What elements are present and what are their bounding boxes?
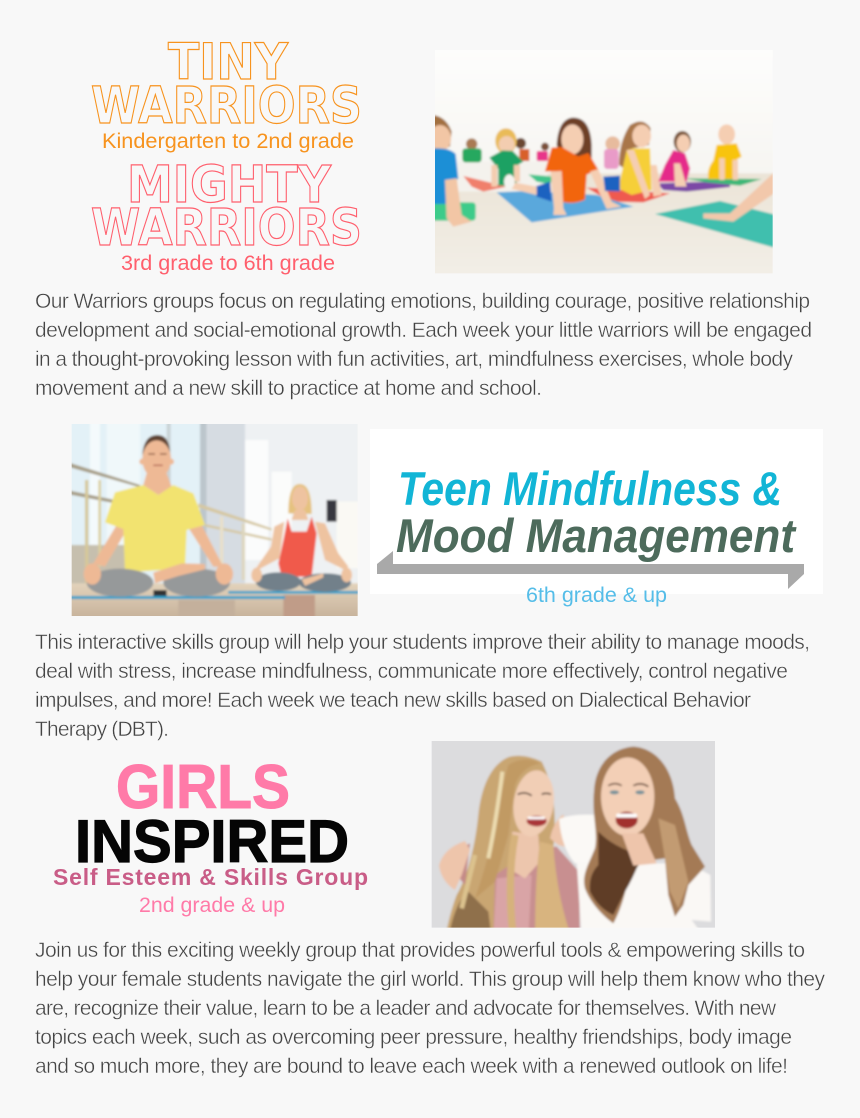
heading: Mighty Warriors: MIGHTY [127, 156, 332, 215]
paragraph: Girls Inspired group: topics each week, such as overcoming peer pressure, healthy friendships, body image [35, 1026, 792, 1049]
paragraph: Warriors groups: development and social-emotional growth. Each week your little warriors will be engaged [35, 319, 812, 342]
paragraph: Teen group: Therapy (DBT). [35, 718, 169, 741]
paragraph: Warriors groups: Our Warriors groups focus on regulating emotions, building courage, positive relationship [35, 290, 810, 313]
heading: Tiny Warriors: TINY [168, 33, 289, 91]
paragraph: Girls Inspired group: and so much more, they are bound to leave each week with a renewed outlook on life! [35, 1055, 788, 1078]
paragraph: Warriors groups [35, 290, 812, 400]
paragraph: Teen group: This interactive skills group will help your students improve their ability to manage moods, [35, 631, 810, 654]
photo: children doing yoga on mats [435, 114, 773, 274]
logo title line 2: Mood Management [396, 509, 797, 562]
heading: Girls Inspired: GIRLS [116, 753, 290, 822]
paragraph: Teen group [35, 631, 810, 741]
logo arrow band [377, 551, 804, 589]
subheading: 3rd grade to 6th grade: 3rd grade to 6th grade [121, 252, 335, 275]
logo title line 1: Teen Mindfulness & [398, 462, 782, 515]
paragraph: Warriors groups: movement and a new skill to practice at home and school. [35, 377, 542, 400]
photo: two laughing girls [432, 741, 715, 928]
paragraph: Teen group: deal with stress, increase mindfulness, communicate more effectively, control negative [35, 660, 788, 683]
logo panel: Teen Mindfulness and Mood Management [370, 429, 823, 594]
paragraph: Girls Inspired group: Join us for this exciting weekly group that provides powerful tools & empowering skills to [35, 939, 805, 962]
heading: Tiny Warriors: WARRIORS [91, 77, 362, 136]
subheading: Self Esteem and Skills Group: Self Esteem & Skills Group [53, 864, 368, 890]
heading: Girls Inspired [75, 753, 349, 875]
subheading: Kindergarten to 2nd grade: Kindergarten to 2nd grade [102, 130, 354, 153]
subheading: 2nd grade and up: 2nd grade & up [139, 894, 285, 917]
heading: Mighty Warriors [91, 156, 362, 258]
heading: Girls Inspired: INSPIRED [75, 808, 349, 875]
paragraph: Warriors groups: in a thought-provoking lesson with fun activities, art, mindfulness exercises, whole body [35, 348, 794, 371]
paragraph: Girls Inspired group: help your female students navigate the girl world. This group will help them know who they [35, 968, 826, 991]
subheading: 6th grade and up: 6th grade & up [526, 584, 667, 607]
photo: adults meditating [72, 424, 358, 616]
heading: Tiny Warriors [91, 33, 362, 136]
heading: Mighty Warriors: WARRIORS [91, 199, 362, 258]
paragraph: Girls Inspired group: are, recognize their value, learn to be a leader and advocate for themselves. With new [35, 997, 777, 1020]
paragraph: Girls Inspired group [35, 939, 826, 1078]
paragraph: Teen group: impulses, and more! Each week we teach new skills based on Dialectical Behavior [35, 689, 751, 712]
